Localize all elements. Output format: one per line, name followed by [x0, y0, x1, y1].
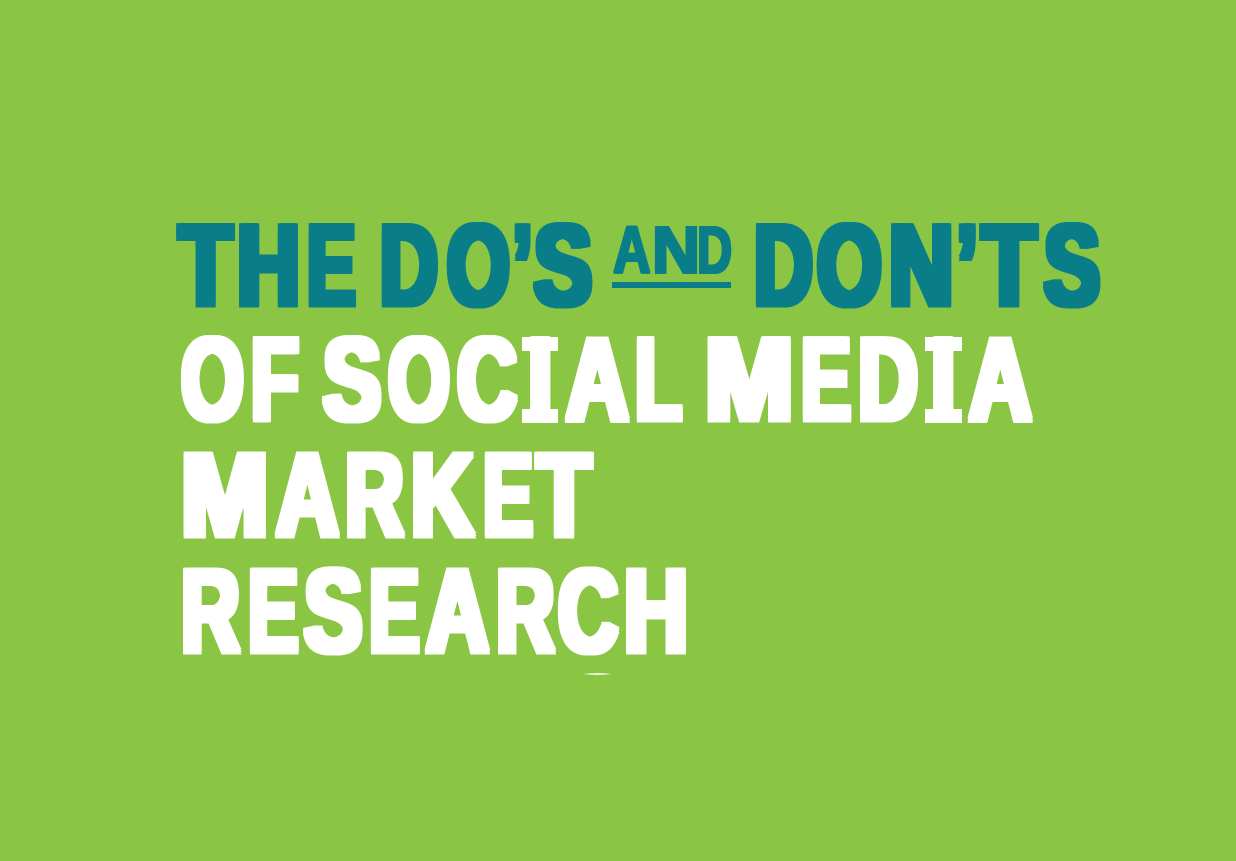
heading line 3: market: M	[181, 429, 268, 562]
heading line 2: of social media	[180, 313, 1033, 445]
small word: and, underlined	[612, 213, 732, 288]
heading line 4: research: E	[369, 545, 420, 678]
heading line 3: market: T	[537, 429, 591, 562]
heading line 2: of social media: S	[323, 313, 381, 445]
heading line 3: market: K	[411, 429, 474, 562]
heading line 4: research: H	[624, 545, 688, 678]
heading line 4: research: S	[304, 545, 362, 678]
heading line 2: of social media: M	[705, 313, 794, 445]
heading line 2: of social media: A	[566, 313, 628, 445]
heading line 4: research: A	[426, 545, 488, 678]
heading line 4: research: R	[496, 545, 555, 678]
heading line 2: of social media: D	[858, 313, 918, 445]
heading line 4: research: C	[558, 545, 619, 678]
heading line 2: of social media: O	[181, 313, 244, 445]
heading line 2: of social media: C	[457, 313, 517, 445]
heading line 1: the do's and don'ts: O	[817, 202, 882, 330]
heading line 1: the do's and don'ts: T	[179, 202, 232, 330]
small word: and, underlined: A	[613, 213, 651, 288]
heading line 1: the do's and don'ts: S	[1044, 202, 1100, 330]
heading line 2: of social media: I	[528, 313, 552, 445]
heading line 2: of social media: O	[388, 313, 450, 445]
heading line 1: the do's and don'ts: H	[237, 202, 300, 330]
heading line 4: research	[181, 545, 688, 678]
heading line 1: the do's and don'ts: ’	[513, 202, 532, 330]
heading line 2: of social media: I	[931, 313, 955, 445]
small word: and, underlined: N	[652, 213, 700, 288]
heading line 1: the do's and don'ts: N	[889, 202, 953, 330]
heading line 3: market	[181, 429, 594, 562]
heading line 2: of social media: A	[969, 313, 1031, 445]
heading line 3: market: A	[276, 429, 339, 562]
heading line 1: the do's and don'ts: S	[534, 202, 592, 330]
heading line 1: the do's and don'ts: O	[447, 202, 510, 330]
heading line 1: the do's and don'ts: D	[380, 202, 438, 330]
heading line 2: of social media: E	[801, 313, 851, 445]
heading line 3: market: R	[345, 429, 404, 562]
small white speck below heading	[584, 673, 612, 675]
small word: and, underlined: D	[697, 213, 732, 288]
heading line 1: the do's and don'ts: D	[754, 202, 813, 330]
heading line 2: of social media: L	[635, 313, 682, 445]
heading line 1: the do's and don'ts: ’	[957, 202, 977, 330]
heading line 1: the do's and don'ts	[176, 202, 1100, 330]
heading line 1: the do's and don'ts: T	[982, 202, 1036, 330]
heading line 1: the do's and don'ts: E	[307, 202, 356, 330]
heading line 3: market: E	[483, 429, 533, 562]
heading line 4: research: R	[181, 545, 240, 678]
heading line 2: of social media: F	[251, 313, 299, 445]
heading line 4: research: E	[248, 545, 298, 678]
